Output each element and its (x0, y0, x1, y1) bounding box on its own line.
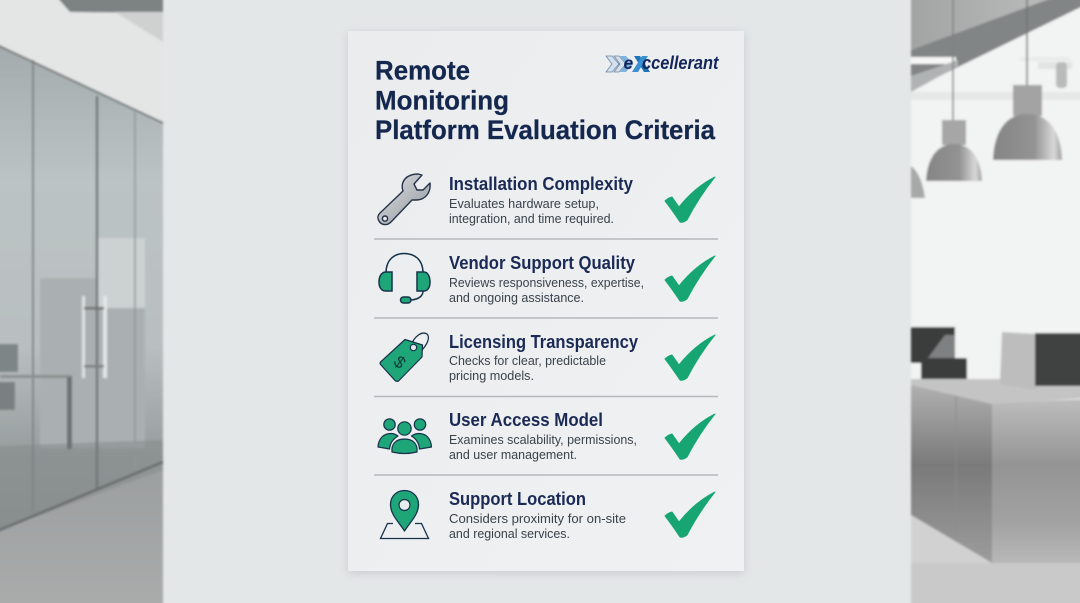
title (375, 56, 716, 145)
icon: headset (379, 254, 430, 303)
description: integration, and time required. (449, 212, 614, 226)
icon: green check (665, 256, 715, 301)
icon: wrench (378, 174, 430, 225)
icon: green check (665, 177, 715, 222)
icon: users (378, 419, 432, 454)
logo: eXccellerant: e (624, 53, 634, 73)
description: Reviews responsiveness, expertise, (449, 276, 644, 290)
criterion: Installation Complexity (378, 174, 715, 226)
heading: Support Location (449, 489, 586, 509)
description: Considers proximity for on-site (449, 512, 626, 526)
heading: Licensing Transparency (449, 332, 638, 352)
description: and user management. (449, 448, 577, 462)
logo: eXccellerant (606, 53, 719, 73)
icon: green check (665, 335, 715, 380)
criterion: Licensing Transparency (380, 332, 715, 383)
background wall (163, 0, 911, 603)
panel shadow (348, 33, 744, 573)
panel: evaluation criteria poster (348, 31, 744, 571)
description (449, 512, 626, 541)
description: Evaluates hardware setup, (449, 197, 599, 211)
heading: User Access Model (449, 410, 603, 430)
criterion: User Access Model (378, 410, 715, 462)
icon: price tag (380, 333, 428, 381)
criterion: Vendor Support Quality (379, 253, 715, 305)
description: and ongoing assistance. (449, 291, 584, 305)
title: Platform Evaluation Criteria (375, 115, 716, 145)
heading: Vendor Support Quality (449, 253, 635, 273)
criterion: Support Location (380, 489, 715, 541)
title: Monitoring (375, 86, 509, 116)
left office scene (0, 0, 163, 603)
description (449, 354, 606, 383)
description: and regional services. (449, 527, 570, 541)
description (449, 433, 637, 462)
title: Remote (375, 56, 470, 86)
description: pricing models. (449, 369, 534, 383)
icon: green check (665, 492, 715, 537)
description (449, 197, 614, 226)
icon: map pin (380, 490, 428, 538)
hanging lamps (911, 0, 1062, 198)
right office scene (911, 0, 1080, 603)
heading: Installation Complexity (449, 174, 633, 194)
description: Checks for clear, predictable (449, 354, 606, 368)
icon: green check (665, 414, 715, 459)
description (449, 276, 644, 305)
logo: eXccellerant: ccellerant (642, 53, 719, 73)
icon: price tag: $ (390, 352, 410, 373)
description: Examines scalability, permissions, (449, 433, 637, 447)
